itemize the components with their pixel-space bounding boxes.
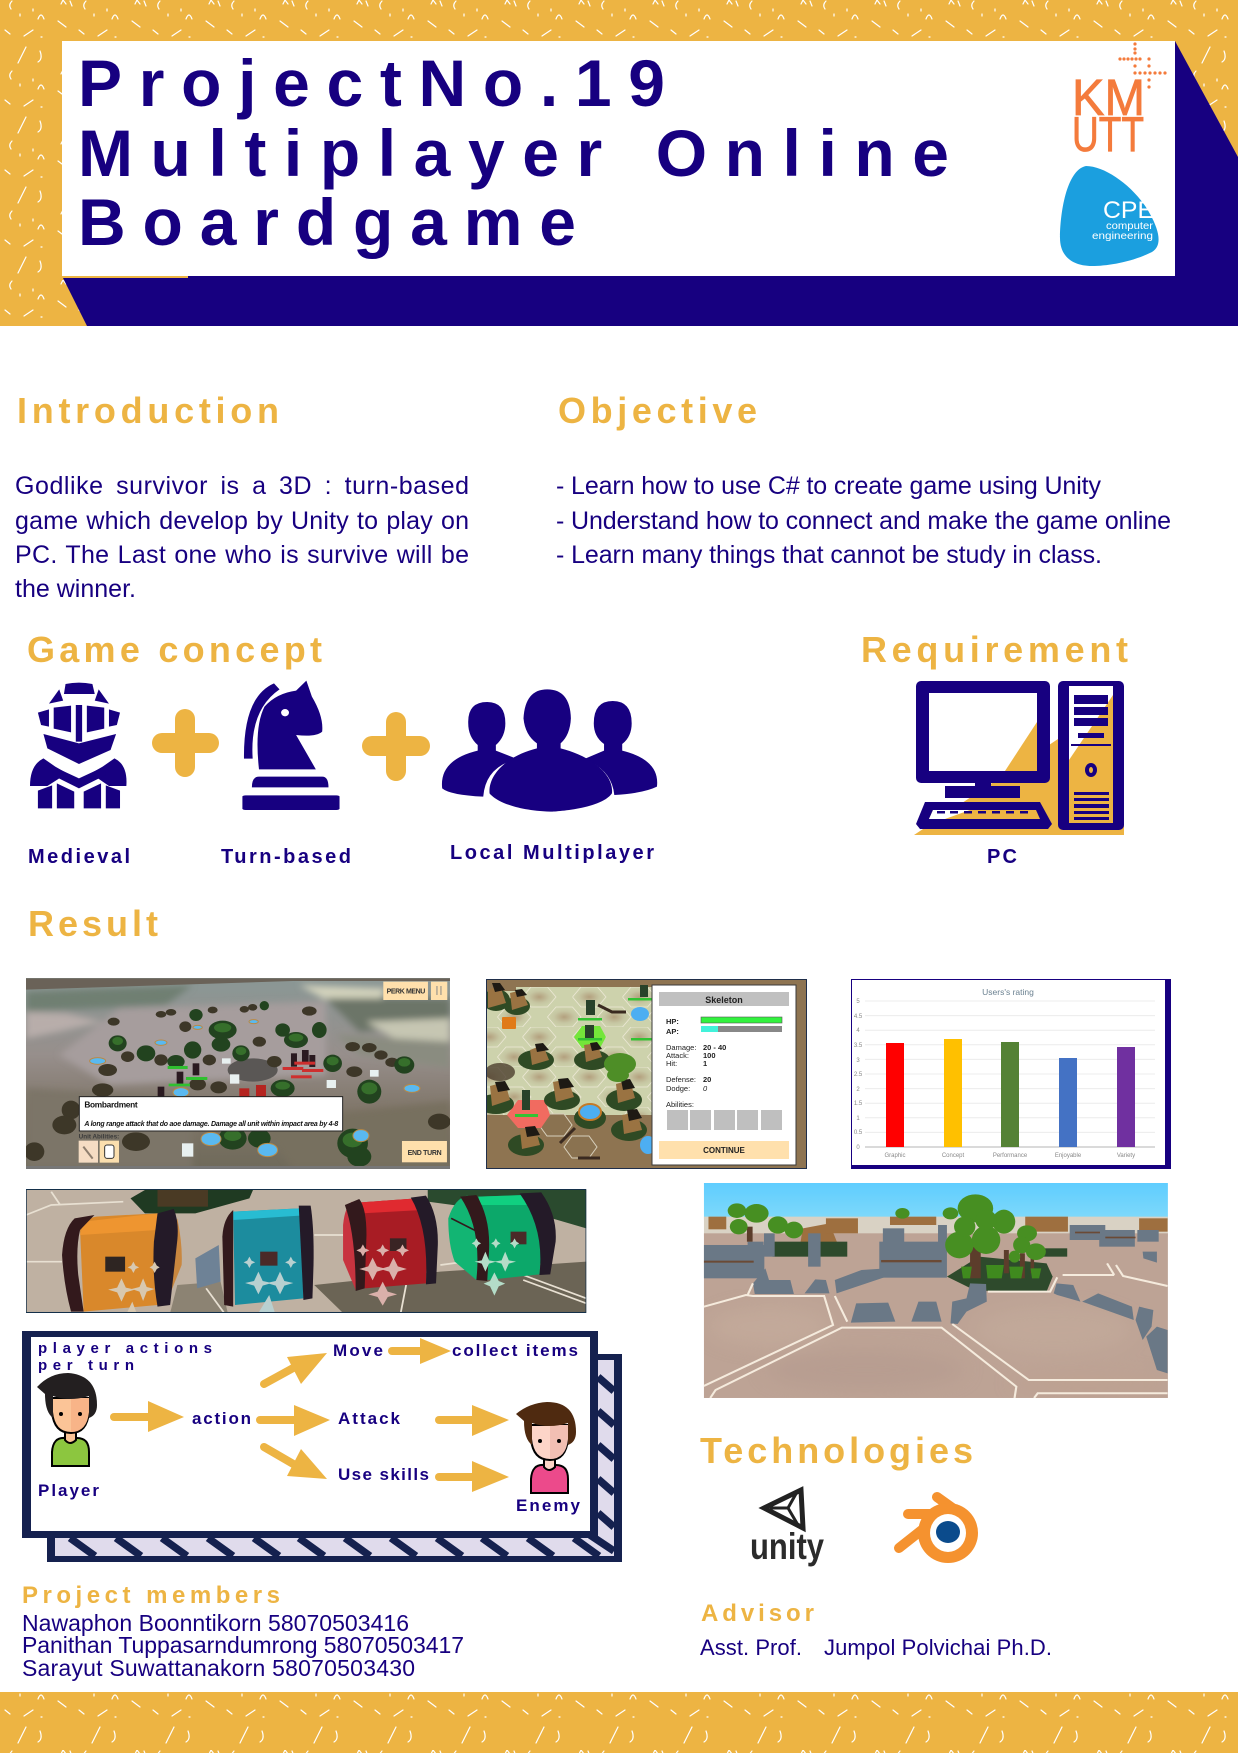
flow labels: collect items <box>452 1341 578 1360</box>
heading: Technologies: Technologies <box>700 1430 973 1471</box>
chart: users rating bar chart: 3.5 <box>854 1043 863 1049</box>
project member names <box>22 1610 464 1681</box>
introduction text: Godlike survivor is a 3D : turn-based <box>15 472 469 500</box>
introduction text: the winner. <box>15 575 136 603</box>
heading: Introduction: Introduction <box>17 390 279 431</box>
project member names: Nawaphon Boonntikorn 58070503416 <box>22 1610 409 1636</box>
heading: Objective: Objective <box>558 390 757 431</box>
heading: Advisor: Advisor <box>701 1600 814 1627</box>
arrow: action to use skills <box>264 1447 327 1479</box>
heading: Requirement: Requirement <box>861 629 1128 670</box>
flow heading: player actions per turn <box>38 1340 212 1374</box>
chart: users rating bar chart: 2.5 <box>854 1072 863 1078</box>
tile mounds <box>478 983 647 1156</box>
title: Multiplayer Online <box>78 116 949 190</box>
icon: plus one <box>152 709 219 777</box>
CPE logo: CPE <box>1103 197 1154 224</box>
green chest <box>448 1192 556 1296</box>
chart: users rating bar chart: 4 <box>856 1028 860 1034</box>
header navy shadow shape <box>62 41 1238 326</box>
project member names: Panithan Tuppasarndumrong 58070503417 <box>22 1632 464 1658</box>
screenshot: game board with bombardment tooltip: Unit Abilities: <box>79 1134 119 1141</box>
screenshot: unit stats panel: Defense: <box>666 1075 696 1084</box>
objective text <box>556 472 1171 569</box>
screenshot: game board with bombardment tooltip: A long range attack that do aoe damage. Damage all unit within impact area by 4-8 <box>83 1121 338 1128</box>
arrow: action to attack <box>260 1405 330 1436</box>
screenshot: unit stats panel: Hit: <box>666 1059 677 1068</box>
screenshot: unit stats panel: Abilities: <box>666 1100 694 1109</box>
chart: users rating bar chart: Enjoyable <box>1055 1153 1082 1159</box>
heading: Result: Result <box>28 903 158 944</box>
chart: users rating bar chart: Graphic <box>884 1153 906 1159</box>
orange chest <box>62 1209 182 1313</box>
arrow: move to collect items <box>392 1338 451 1364</box>
arrow: attack to enemy <box>439 1405 509 1436</box>
icon: knight helmet <box>30 683 127 808</box>
label: PC: PC <box>987 846 1017 868</box>
chart: users rating bar chart: 2 <box>856 1087 860 1093</box>
icon: chess knight <box>242 681 340 810</box>
footer patterned band <box>0 1692 1238 1753</box>
chart: users rating bar chart: Performance <box>993 1153 1028 1159</box>
red chest <box>343 1196 438 1306</box>
chart: users rating bar chart: 1.5 <box>854 1101 863 1107</box>
KMUTT logo: KM <box>1072 69 1145 126</box>
flow heading: player actions per turn: player actions <box>38 1340 212 1357</box>
chart: users rating bar chart: 4.5 <box>854 1014 863 1020</box>
label: Local Multiplayer: Local Multiplayer <box>450 842 654 864</box>
screenshot: game board with bombardment tooltip: Bombardment <box>84 1100 138 1110</box>
teal chest <box>222 1206 314 1313</box>
logo: Unity <box>750 1490 824 1567</box>
flow labels: Enemy <box>516 1496 581 1515</box>
header patterned band <box>0 0 1238 326</box>
chart title: Users's rating <box>982 987 1034 997</box>
flow labels: action <box>192 1409 251 1428</box>
title: Boardgame <box>78 185 576 259</box>
heading: Project members: Project members <box>22 1582 280 1609</box>
character: Enemy <box>516 1402 576 1493</box>
header white title panel <box>62 41 1175 276</box>
project member names: Sarayut Suwattanakorn 58070503430 <box>22 1655 415 1681</box>
icon: plus two <box>362 712 430 781</box>
screenshot: unit stats panel: AP: <box>666 1027 679 1036</box>
icon: group of people <box>442 689 657 812</box>
screenshot: unit stats panel: 0 <box>703 1084 708 1093</box>
logo: Unity: unity <box>750 1526 824 1567</box>
chart: users rating bar chart: 3 <box>856 1058 860 1064</box>
objective text: - Learn many things that cannot be study in class. <box>556 541 1102 569</box>
screenshot: castle ruins hex map <box>704 1183 1168 1398</box>
screenshot: unit stats panel <box>478 979 807 1169</box>
screenshot: game board with bombardment tooltip <box>24 978 451 1169</box>
objective text: - Learn how to use C# to create game using Unity <box>556 472 1102 500</box>
CPE logo <box>1060 166 1159 266</box>
chart: users rating bar chart: Concept <box>942 1153 965 1159</box>
advisor name: Asst. Prof. <box>700 1635 802 1660</box>
screenshot: unit stats panel: Dodge: <box>666 1084 690 1093</box>
advisor name: Jumpol Polvichai Ph.D. <box>824 1635 1052 1660</box>
flow labels: Player <box>38 1481 99 1500</box>
flow labels: Attack <box>338 1409 401 1428</box>
screenshot: unit stats panel: 100 <box>703 1051 716 1060</box>
advisor name <box>700 1635 1052 1660</box>
screenshot: unit stats panel: Attack: <box>666 1051 689 1060</box>
character: Player <box>37 1373 97 1466</box>
title: ProjectNo.19 <box>78 46 665 120</box>
icon: desktop PC <box>914 681 1124 835</box>
title <box>78 46 949 259</box>
flow heading: player actions per turn: per turn <box>38 1357 134 1374</box>
CPE logo: engineering <box>1092 230 1153 242</box>
chart: users rating bar chart: 5 <box>856 999 860 1005</box>
arrow: use skills to enemy <box>439 1461 509 1492</box>
introduction text: PC. The Last one who is survive will be <box>15 541 469 569</box>
chart: users rating bar chart: 1 <box>856 1116 860 1122</box>
screenshot: unit stats panel: 20 - 40 <box>703 1043 726 1052</box>
flow labels <box>38 1341 581 1515</box>
screenshot: unit stats panel: HP: <box>666 1017 679 1026</box>
KMUTT logo <box>1072 42 1167 162</box>
chart: users rating bar chart: Variety <box>1117 1153 1135 1159</box>
objective text: - Understand how to connect and make the game online <box>556 507 1171 535</box>
screenshot: four treasure chests <box>26 1189 586 1313</box>
heading: Game concept: Game concept <box>27 629 322 670</box>
chart: users rating bar chart: 0.5 <box>854 1130 863 1136</box>
label: Medieval: Medieval <box>28 846 130 868</box>
arrow: player to action <box>114 1401 184 1432</box>
flow labels: Move <box>333 1341 383 1360</box>
chart: users rating bar chart: 0 <box>856 1145 860 1151</box>
logo: Blender <box>899 1497 978 1563</box>
screenshot: unit stats panel: Damage: <box>666 1043 696 1052</box>
screenshot: unit stats panel: Skeleton <box>705 995 743 1005</box>
flow labels: Use skills <box>338 1465 429 1484</box>
arrow: action to move <box>264 1353 327 1384</box>
chart: users rating bar chart <box>851 979 1171 1169</box>
screenshot: unit stats panel: 1 <box>703 1059 707 1068</box>
label: Turn-based: Turn-based <box>221 846 351 868</box>
header small orange strip <box>62 274 188 278</box>
screenshot: game board with bombardment tooltip: PERK MENU <box>387 989 425 996</box>
flow diagram front panel <box>22 1331 598 1538</box>
screenshot: unit stats panel: 20 <box>703 1075 711 1084</box>
KMUTT logo: UTT <box>1072 108 1144 162</box>
screenshot: unit stats panel: CONTINUE <box>703 1146 746 1155</box>
flow diagram back panel <box>47 1354 622 1562</box>
CPE logo: computer <box>1106 220 1154 232</box>
introduction text <box>15 472 469 603</box>
introduction text: game which develop by Unity to play on <box>15 507 469 535</box>
screenshot: game board with bombardment tooltip: END TURN <box>408 1150 442 1157</box>
